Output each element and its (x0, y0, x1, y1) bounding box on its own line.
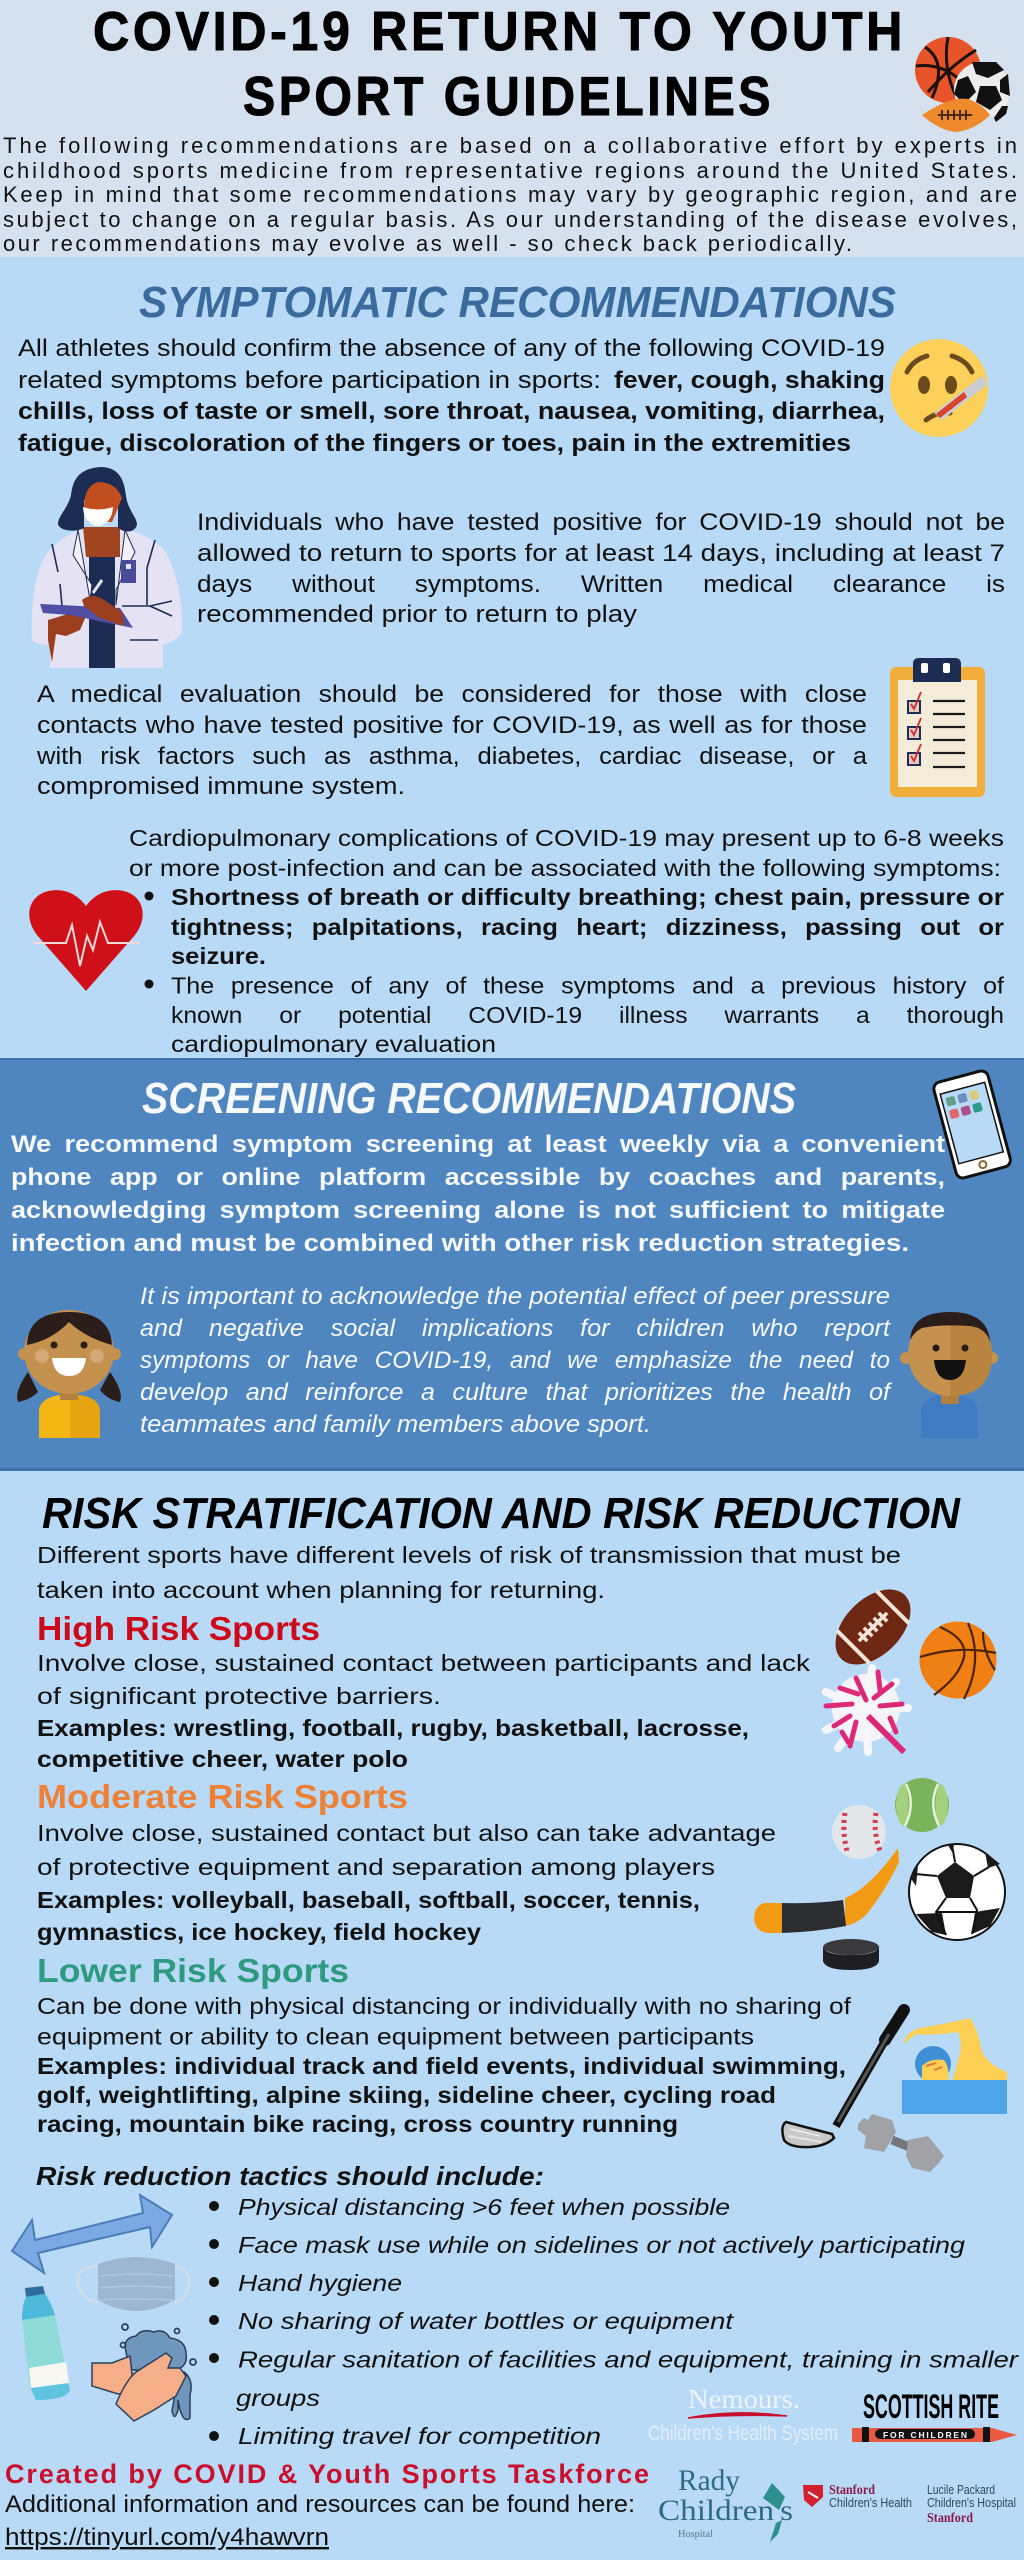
icon: phone (932, 1069, 1012, 1180)
text: lower risk sports: Examples: individual track and field events, individual swimming, (37, 2053, 846, 2079)
logo: Stanford Children's Health: Children's Health (829, 2495, 912, 2510)
text: screening summary (11, 1131, 945, 1257)
icon: sports balls (915, 37, 1010, 132)
text: credits (5, 2459, 649, 2551)
list: risk reduction tactics (209, 2194, 1020, 2449)
text: symptom list: fatigue, discoloration of the fingers or toes, pain in the extremities (18, 430, 851, 457)
icon: heart with pulse (29, 890, 143, 991)
text: cardiopulmonary: Shortness of breath or difficulty breathing; chest pain, pressure or (171, 884, 1004, 910)
logo: Lucile Packard (927, 2482, 1016, 2526)
text: peer pressure note: symptoms or have COVID-19, and we emphasize the need to (140, 1347, 890, 1374)
text: lower risk sports (37, 1952, 852, 2137)
logo: Lucile Packard: Lucile Packard (927, 2482, 995, 2497)
text: peer pressure note: and negative social implications for children who report (140, 1315, 891, 1342)
icon: hockey stick (754, 1848, 899, 1933)
logo: Stanford Children's Health (803, 2483, 912, 2510)
text: peer pressure note: teammates and family members above sport. (140, 1411, 651, 1438)
icon: clipboard (890, 658, 985, 797)
logo: Nemours (648, 2384, 838, 2445)
text: lower risk sports: equipment or ability to clean equipment between participants (37, 2024, 754, 2050)
heading: risk stratification: RISK STRATIFICATION AND RISK REDUCTION (42, 1489, 961, 1538)
list: risk reduction tactics: Physical distancing >6 feet when possible (238, 2194, 730, 2220)
icon: water bottle (22, 2286, 70, 2400)
text: screening summary: phone app or online platform accessible by coaches and parents, (11, 1164, 945, 1191)
icon: football (821, 1575, 925, 1679)
heading: symptomatic: SYMPTOMATIC RECOMMENDATIONS (139, 278, 896, 327)
panel: header (0, 0, 1024, 257)
text: medical evaluation: compromised immune system. (37, 773, 405, 800)
text: moderate risk sports (37, 1778, 776, 1945)
icon: girl (17, 1310, 121, 1438)
intro text (3, 133, 1017, 256)
logo: Nemours: Children's Health System (648, 2422, 838, 2445)
text: lower risk sports: Can be done with physical distancing or individually with no sharing of (37, 1993, 852, 2019)
text: high risk sports: Examples: wrestling, football, rugby, basketball, lacrosse, (37, 1715, 749, 1741)
text: cardiopulmonary: cardiopulmonary evaluation (171, 1031, 496, 1057)
text: screening summary: infection and must be combined with other risk reduction strategies. (11, 1230, 909, 1257)
text: high risk sports (37, 1610, 811, 1772)
text: medical evaluation: A medical evaluation should be considered for those with close (37, 681, 867, 708)
text: positive tests: allowed to return to sports for at least 14 days, including at least 7 (197, 540, 1005, 567)
text: medical evaluation (36, 681, 868, 800)
logo: Nemours: Nemours. (688, 2384, 800, 2414)
panel: risk stratification (5, 1489, 1020, 2551)
text: credits: https://tinyurl.com/y4hawvrn (5, 2524, 329, 2551)
icon: hockey puck (823, 1939, 879, 1970)
text: lower risk sports: Lower Risk Sports (37, 1952, 349, 1989)
intro text: The following recommendations are based on a collaborative effort by experts in (3, 133, 1017, 158)
list: risk reduction tactics: groups (236, 2385, 321, 2411)
logo: Rady Children's: Children's (658, 2494, 793, 2527)
text: moderate risk sports: gymnastics, ice hockey, field hockey (37, 1919, 481, 1945)
text: tactics heading: Risk reduction tactics should include: (36, 2161, 544, 2191)
intro text: our recommendations may evolve as well - so check back periodically. (3, 231, 852, 256)
text: symptom list: All athletes should confirm the absence of any of the following COVID-19 (18, 335, 885, 362)
panel: screening recommendations (0, 1058, 1024, 1471)
text: moderate risk sports: of protective equipment and separation among players (37, 1854, 715, 1880)
text: screening summary: acknowledging symptom screening alone is not sufficient to mitigate (11, 1197, 945, 1224)
icon: doctor (32, 467, 182, 668)
text: moderate risk sports: Moderate Risk Sports (37, 1778, 408, 1815)
text: cardiopulmonary (129, 825, 1005, 1057)
text: credits: Additional information and resources can be found here: (5, 2491, 635, 2518)
text: lower risk sports: racing, mountain bike racing, cross country running (37, 2111, 678, 2137)
text: peer pressure note: develop and reinforce a culture that prioritizes the health of (140, 1379, 892, 1406)
logo: Rady Children's: Hospital (678, 2529, 713, 2540)
heading: screening: SCREENING RECOMMENDATIONS (142, 1074, 796, 1123)
text: risk intro: Different sports have different levels of risk of transmission that must be (37, 1542, 901, 1568)
list: risk reduction tactics: Face mask use while on sidelines or not actively participating (238, 2232, 965, 2258)
text: positive tests: Individuals who have tested positive for COVID-19 should not be (197, 509, 1005, 536)
logo: Lucile Packard: Stanford (927, 2511, 973, 2526)
icon: soccer ball (909, 1844, 1005, 1940)
text: cardiopulmonary: The presence of any of these symptoms and a previous history of (171, 972, 1005, 998)
list: risk reduction tactics: Limiting travel for competition (238, 2423, 601, 2449)
text: cardiopulmonary: tightness; palpitations, racing heart; dizziness, passing out or (171, 914, 1004, 940)
text: cardiopulmonary: Cardiopulmonary complications of COVID-19 may present up to 6-8 weeks (129, 825, 1004, 851)
text: peer pressure note: It is important to acknowledge the potential effect of peer pressure (140, 1283, 890, 1310)
icon: sick face with thermometer (890, 339, 988, 437)
text: cardiopulmonary: seizure. (171, 943, 266, 969)
logo: Scottish Rite (852, 2388, 1017, 2442)
icon: golf club (782, 2010, 904, 2147)
list: risk reduction tactics: Hand hygiene (238, 2270, 402, 2296)
icon: tennis ball (895, 1778, 949, 1832)
text: cardiopulmonary: or more post-infection and can be associated with the following symptoms: (129, 855, 1001, 881)
icon: boy (900, 1312, 998, 1438)
intro text: Keep in mind that some recommendations may vary by geographic region, and are (3, 182, 1017, 207)
logo: Rady Children's (658, 2464, 793, 2542)
text: symptom list (18, 335, 885, 457)
title (93, 0, 906, 127)
text: positive tests: recommended prior to return to play (197, 601, 637, 628)
title: COVID-19 RETURN TO YOUTH (93, 0, 906, 62)
text: medical evaluation: contacts who have tested positive for COVID-19, as well as for those (37, 712, 867, 739)
text: moderate risk sports: Involve close, sustained contact but also can take advantage (37, 1820, 776, 1846)
logo: Stanford Children's Health: Stanford (829, 2483, 875, 2498)
icon: basketball (920, 1622, 996, 1699)
icon: pom-pom (826, 1668, 908, 1752)
text: risk intro (37, 1542, 901, 1603)
icon: swimmer (902, 2018, 1007, 2114)
intro text: subject to change on a regular basis. As our understanding of the disease evolves, (3, 207, 1017, 232)
text: symptom list: related symptoms before participation in sports: (18, 367, 601, 394)
icon: dumbbell (858, 2114, 944, 2172)
text: positive tests: days without symptoms. Written medical clearance is (197, 571, 1005, 598)
logo: Rady Children's: Rady (678, 2464, 740, 2497)
text: positive tests (197, 509, 1005, 628)
list: risk reduction tactics: Regular sanitation of facilities and equipment, training in smaller (238, 2346, 1020, 2372)
text: peer pressure note (140, 1283, 892, 1438)
text: high risk sports: Involve close, sustained contact between participants and lack (37, 1650, 811, 1676)
list: risk reduction tactics: No sharing of water bottles or equipment (238, 2308, 735, 2334)
text: high risk sports: of significant protective barriers. (37, 1683, 441, 1709)
logo: Scottish Rite: FOR CHILDREN (883, 2430, 967, 2440)
text: credits: Created by COVID & Youth Sports Taskforce (5, 2459, 649, 2489)
text: screening summary: We recommend symptom screening at least weekly via a convenient (11, 1131, 945, 1158)
icon: washing hands (92, 2324, 196, 2421)
text: risk intro: taken into account when planning for returning. (37, 1577, 605, 1603)
text: medical evaluation: with risk factors such as asthma, diabetes, cardiac disease, or a (36, 743, 868, 770)
icon: face mask (77, 2257, 189, 2311)
text: symptom list: chills, loss of taste or smell, sore throat, nausea, vomiting, diarrhea, (18, 398, 885, 425)
text: symptom list: fever, cough, shaking (614, 367, 885, 394)
title: SPORT GUIDELINES (243, 65, 774, 127)
panel: symptomatic recommendations (18, 278, 1005, 1057)
text: high risk sports: High Risk Sports (37, 1610, 320, 1647)
text: lower risk sports: golf, weightlifting, alpine skiing, sideline cheer, cycling road (37, 2082, 776, 2108)
text: high risk sports: competitive cheer, water polo (37, 1746, 408, 1772)
text: cardiopulmonary: known or potential COVID-19 illness warrants a thorough (171, 1002, 1004, 1028)
intro text: childhood sports medicine from representative regions around the United States. (3, 158, 1017, 183)
icon: baseball (832, 1805, 886, 1859)
icon: double arrow (12, 2195, 172, 2273)
text: moderate risk sports: Examples: volleyball, baseball, softball, soccer, tennis, (37, 1887, 700, 1913)
